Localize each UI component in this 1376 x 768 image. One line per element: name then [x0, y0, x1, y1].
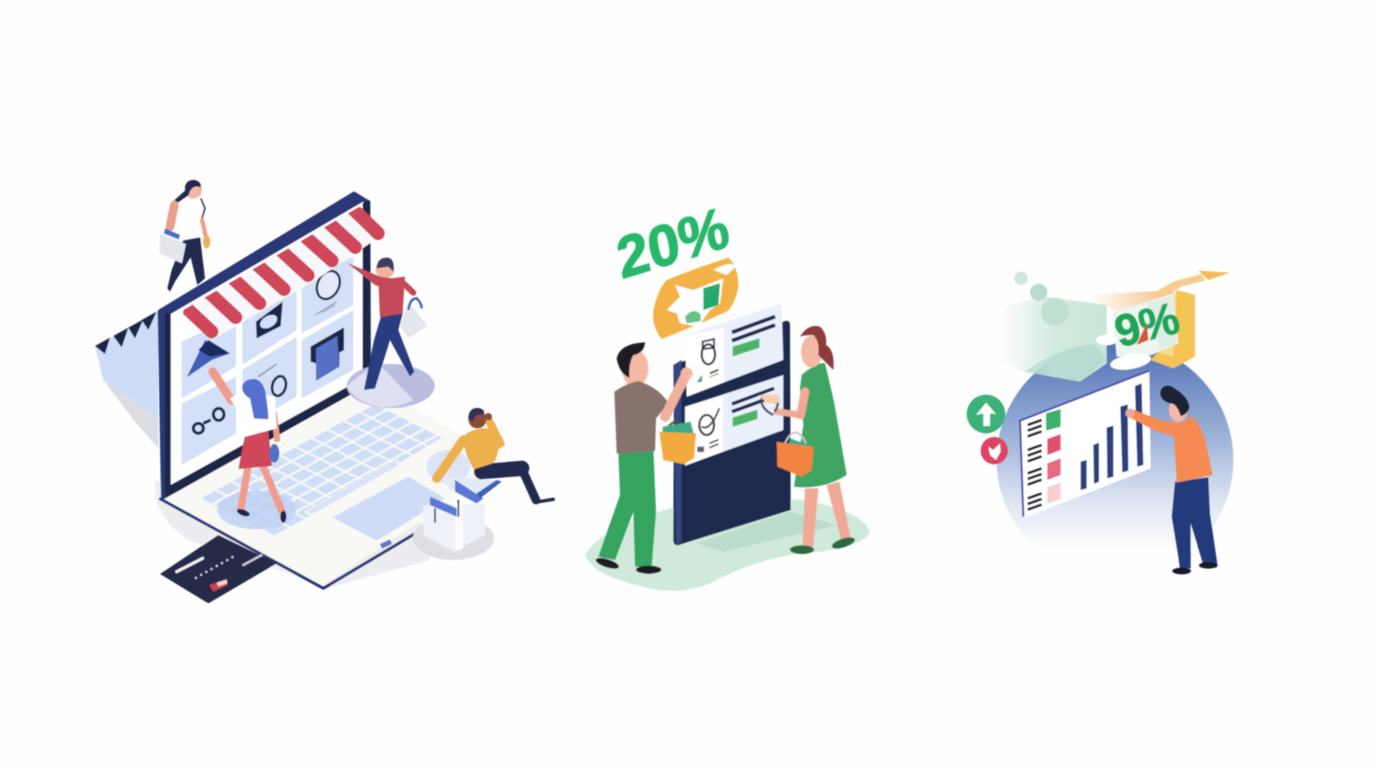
percentage card — [1096, 293, 1184, 372]
icon: bag shape — [256, 302, 283, 338]
top product card — [685, 303, 783, 397]
awning — [183, 207, 385, 339]
icon: green up arrow circle — [967, 395, 1005, 433]
bar chart — [1081, 383, 1143, 490]
dashboard chart card — [1020, 370, 1151, 518]
person: woman in red skirt — [213, 372, 286, 523]
credit card — [160, 535, 277, 603]
blue gradient circle — [997, 342, 1233, 578]
floating green box — [1000, 272, 1107, 382]
back storefront wall — [95, 312, 158, 448]
person: seated man in yellow — [413, 408, 553, 560]
icon: ring small — [258, 364, 288, 397]
icon: glasses — [193, 408, 224, 433]
icon: t-shirt — [311, 327, 344, 381]
icon: ring top right — [312, 267, 344, 315]
icon: red down arrow circle — [981, 437, 1008, 464]
icon: paper plane — [187, 340, 230, 377]
lower product card — [685, 375, 783, 466]
orange discount badge — [653, 258, 738, 339]
person: man with basket — [595, 342, 696, 574]
green ground blob — [585, 499, 870, 591]
orange box with arrow — [1087, 271, 1230, 368]
laptop ground shadow — [155, 480, 430, 587]
product board — [673, 321, 837, 552]
person: man in red pointing — [347, 258, 435, 408]
legend rows — [1028, 409, 1061, 510]
panel: laptop storefront illustration — [95, 180, 553, 603]
person: man in orange touching chart — [1125, 386, 1218, 574]
person: woman in green dress — [758, 326, 856, 554]
panel: shoppers at product board illustration — [585, 195, 870, 591]
laptop base and keyboard — [159, 380, 508, 588]
percentage label: 20% — [612, 195, 734, 292]
person: woman walking with bag on top — [159, 180, 210, 292]
panel: analytics dashboard illustration — [967, 271, 1233, 578]
laptop screen — [160, 194, 370, 498]
percentage text: 9% — [1110, 294, 1184, 357]
